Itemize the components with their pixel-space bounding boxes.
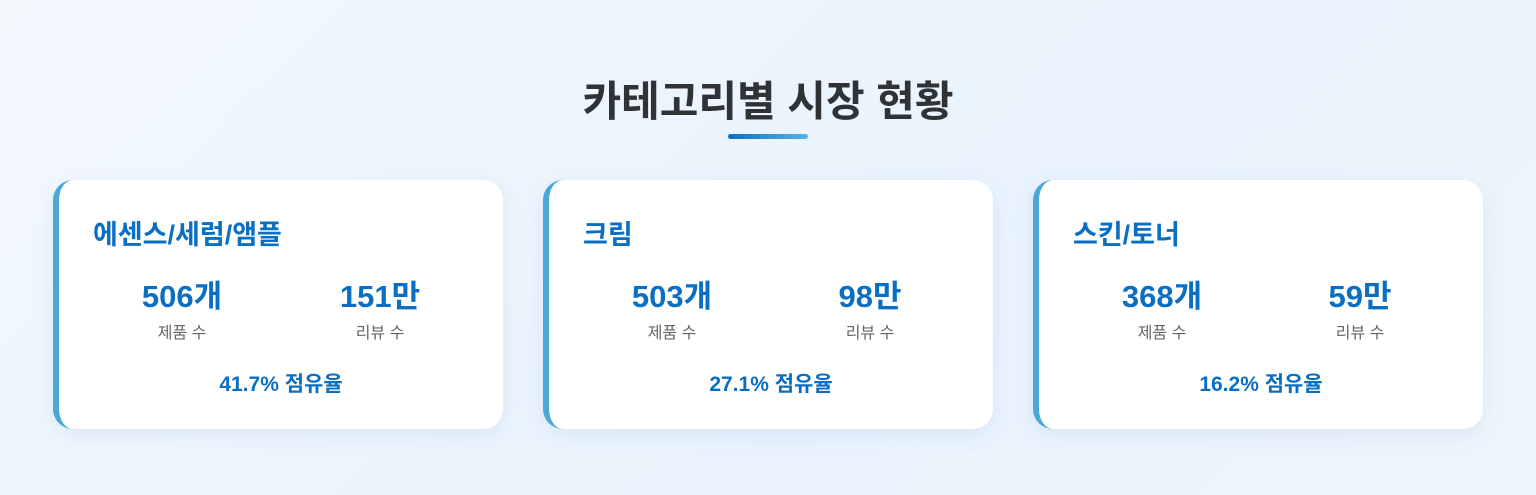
stat: reviews (838, 279, 902, 342)
stat: products: 제품 수 (158, 325, 206, 342)
stat: products (142, 279, 222, 342)
share: 41.7% 점유율 (219, 373, 343, 396)
stat: reviews: 리뷰 수 (846, 325, 894, 342)
stat: products: 506개 (142, 279, 222, 314)
stat: products (632, 279, 712, 342)
stat: reviews (1328, 279, 1392, 342)
stat: products: 503개 (632, 279, 712, 314)
title underline (728, 134, 808, 139)
stat: products (1122, 279, 1202, 342)
stat: reviews: 151만 (340, 279, 420, 314)
stat: reviews: 98만 (838, 279, 902, 314)
stat: products: 368개 (1122, 279, 1202, 314)
stat: products: 제품 수 (1138, 325, 1186, 342)
panel: essence (53, 180, 503, 429)
panel: skin toner (1033, 180, 1483, 429)
title: 카테고리별 시장 현황 (582, 78, 954, 125)
card title: 스킨/토너 (1073, 220, 1180, 250)
card title: 에센스/세럼/앰플 (93, 220, 282, 250)
share: 16.2% 점유율 (1199, 373, 1323, 396)
stat: reviews: 리뷰 수 (1336, 325, 1384, 342)
stat: reviews: 리뷰 수 (356, 325, 404, 342)
stat: products: 제품 수 (648, 325, 696, 342)
stat: reviews (340, 279, 420, 342)
stat: reviews: 59만 (1328, 279, 1392, 314)
share: 27.1% 점유율 (709, 373, 833, 396)
panel: cream (543, 180, 993, 429)
card title: 크림 (583, 220, 633, 250)
